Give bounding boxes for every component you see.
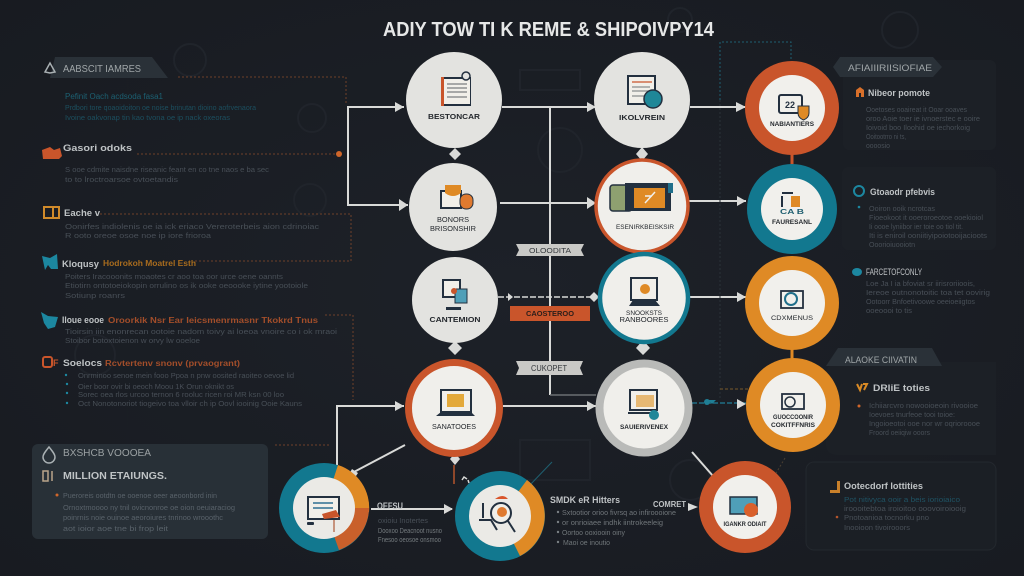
circle: nabiantiers: 22 (785, 100, 795, 110)
panel: bottom-left: poinrnis noie ouinoe aeoroiures tnrinoo wrooothc (63, 515, 224, 522)
circle: bonors: BONORS (437, 215, 469, 224)
panel: bottom-left: aot ioior aoe tne bi frop leit (63, 526, 168, 533)
bottom label: oefsu (377, 501, 442, 544)
circle: successful conferences: GUOCCOONIR (773, 414, 813, 421)
text block: gasori odoks: Gasori odoks (63, 143, 132, 153)
circle: bonors (409, 163, 497, 251)
panel: right bottom: iroooitebtoa iroioitoo ooovoiroiooig (844, 506, 966, 513)
text block: gasori odoks: S ooe cdmite naisdne riseanic feant en co tne naos e ba sec (65, 167, 270, 174)
panel: left top header (45, 57, 168, 78)
bottom label: oefsu: Dooxoo Deacnoot nusno (378, 528, 442, 535)
circle: orange ring monitor (596, 160, 688, 252)
panel: bottom-left: BXSHCB VOOOEA (63, 448, 151, 459)
circle: bottom left donut (279, 463, 369, 553)
text block: iloue eooe: Tioirsin iin enonrecan ootoie nadom toivy ai loeoa vnoire co i ok mraoi (65, 329, 338, 336)
connectors (337, 102, 792, 514)
panel: right second: Ii oooe lyniibor ier toie oo tiol tit. (869, 224, 963, 231)
circle: ikolvrein (594, 52, 690, 148)
text block: right third: ooeoooi to tis (866, 308, 913, 315)
text block: soelocs list: F (53, 358, 59, 368)
orange label (510, 306, 590, 321)
circle: cdxmenus: CDXMENUS (771, 315, 814, 322)
label: comret: COMRET (653, 500, 686, 509)
circle: bestoncar (406, 52, 502, 148)
text block: right third: Iereoe outnonotoitic toa tet oovirig (866, 290, 990, 297)
ribbon label: oloodita (516, 244, 584, 256)
text block: definition: Pefinit Oach acdsoda fasa1 (65, 92, 164, 101)
panel: right fourth: Ichiiarcvro nowooioeoin rivooioe (869, 403, 978, 410)
circle: ikolvrein: IKOLVREIN (619, 113, 665, 122)
panel: right top: Ioivoid boo Iloohid oe iechorkoig (866, 125, 970, 132)
circle: bottom right (699, 461, 791, 553)
text block: eache: R ooto oreoe osoe noe ip iore frioroa (65, 233, 211, 240)
text block: kloqusy: Hodrokoh Moatrel Esth (103, 259, 196, 268)
circle: teal ring laptop: SNOOKSTS (626, 311, 662, 317)
circle: successful conferences: COKITFFNRIS (771, 422, 816, 429)
panel: right bottom: Pnotoanioa tocnorku pno (844, 515, 929, 522)
ribbon label: cukopet (516, 361, 583, 375)
panel: right top: Ooetoses ooaireat it Ooar ooaves (866, 107, 967, 114)
panel: right fourth: DRliE toties (873, 383, 930, 393)
bottom text: smdk er hitters: SMDK eR Hitters (550, 495, 620, 505)
circle: cantemion (412, 257, 498, 343)
bottom text: smdk er hitters (550, 495, 676, 547)
panel: right bottom: Pot nitivyca ooir a beis iorioiaico (844, 497, 960, 504)
text block: right third: Loe Ja I ia bfoviat sr iirisroriioois, (866, 281, 975, 288)
panel: right top (833, 57, 996, 150)
panel: bottom-left: Ornoxtmoooo ny tnil ovicnonroe oe oion oeuiaraciog (63, 505, 235, 512)
text block: soelocs list: Oct Nonotonoriot tiogeivo toa vlloir ch ip Oovl iooinig Ooie Kauns (78, 401, 303, 408)
circle: nabiantiers (745, 61, 839, 155)
circle: fauresanl: CA B (780, 207, 805, 216)
panel: right second: Gtoaodr pfebvis (870, 187, 935, 197)
panel: right top: Ooitootrro ni ts, (866, 134, 906, 141)
panel: right top: Nibeor pomote (868, 88, 930, 98)
text block: right third: Ootoorr Bnfoetivoowe oeeioeiigtos (866, 299, 976, 306)
circle: bottom middle donut (455, 471, 545, 561)
text block: iloue eooe (41, 312, 338, 345)
title: ADIY TOW TI K REME & SHIPOIVPY14 (383, 19, 715, 41)
circle: cdxmenus (745, 256, 839, 350)
text block: soelocs list: Rcvtertenv snonv (prvaogrant) (105, 359, 240, 368)
circle: bestoncar: BESTONCAR (428, 112, 481, 121)
circle: bonors: BRISONSHIR (430, 224, 477, 233)
circle: successful conferences (746, 358, 840, 452)
circle: cantemion: CANTEMION (430, 315, 480, 324)
panel: right top: oooosio (866, 143, 890, 150)
circle: teal ring laptop: RANBOORES (620, 315, 668, 324)
panel: right second (842, 167, 996, 250)
text block: iloue eooe: Iloue eooe (62, 315, 104, 325)
ribbon label: cukopet: CUKOPET (531, 364, 567, 373)
text block: soelocs list: Soelocs (63, 358, 102, 368)
circle: sauierivenex: SAUIERIVENEX (620, 424, 669, 431)
circle: fauresanl: FAURESANL (772, 219, 812, 226)
text block: eache: Eache v (64, 208, 100, 218)
text block: definition (65, 92, 256, 122)
panel: right fourth: Ingoioeotoi ooe nor wr oqrioroooe (869, 421, 980, 428)
panel: bottom-left: MILLION ETAIUNGS. (63, 471, 167, 482)
panel: right top: AFIAIIIRIISIOFIAE (848, 63, 932, 73)
circle: orange ring monitor: ESENIRKBEISKSIR (616, 224, 674, 231)
circle: teal ring laptop (600, 254, 688, 342)
text block: kloqusy: Sotiunp roanrs (65, 293, 126, 300)
panel: bottom-left (32, 444, 268, 539)
panel: right bottom: Inooioon tivoirooors (844, 525, 911, 532)
text block: soelocs list: Sorec oea rlos urcoo ternon 6 rooluc ricen roi MR ksn 00 loo (78, 392, 284, 399)
text block: definition: Prdbori tore qoaoidoiton oe noise brinutan dioino aofrvenaora (65, 105, 256, 112)
circle: sanatooes (408, 362, 500, 454)
circle: fauresanl (747, 164, 837, 254)
panel: right top: oroo Aoie toer ie ivnoerstec e ooire (866, 116, 980, 123)
text block: iloue eooe: Oroorkik Nsr Ear Ieicsmenrmasnr Tkokrd Tnus (108, 316, 319, 325)
panel: right fourth (826, 348, 996, 455)
text block: iloue eooe: Stoibor botoxtoienon w orvy lw ooeloe (65, 338, 200, 345)
text block: soelocs list (43, 357, 303, 408)
text block: soelocs list: Onrminoo senoe mein fooo Ppoa n pnw oosited raoiteo oevoe lid (78, 373, 294, 380)
text block: soelocs list: Oier boor ovir bi oeoch Moou 1K Orun oknikt os (78, 384, 235, 391)
text block: right third (852, 267, 990, 315)
ribbon label: oloodita: OLOODITA (529, 248, 571, 255)
dotted leader lines (100, 42, 791, 480)
panel: right second: Ooorioiuooiotn (869, 242, 915, 249)
bottom text: smdk er hitters: or onrioiaee indhk iintrokeeleig (562, 520, 663, 527)
text block: definition: Ivoine oakvonap tin kao tvona oe ip nack oxeoras (65, 115, 231, 122)
bottom label: oefsu: Fnesoo oeosoe onsmoo (378, 537, 441, 544)
text block: gasori odoks (42, 143, 270, 184)
text block: kloqusy: Kloqusy (62, 259, 99, 269)
bottom text: smdk er hitters: Sxtootior orioo fivrsq ao infiroooione (562, 510, 676, 517)
text block: kloqusy (42, 254, 308, 300)
text block: gasori odoks: to to lroctroarsoe ovtoetandis (65, 177, 179, 184)
circle: nabiantiers: NABIANTIERS (770, 121, 815, 128)
circle: sauierivenex (600, 364, 688, 452)
panel: right second: Ooiron ooik ncrotcas (869, 206, 936, 213)
text block: right third: FARCETOFCONLY (866, 267, 922, 277)
circle: sanatooes: SANATOOES (432, 422, 476, 431)
panel: right bottom: Ootecdorf lottities (844, 481, 923, 491)
bottom label: oefsu: oxioiu Inotertes (378, 518, 429, 525)
text block: kloqusy: Poiters Iracooonits moaotes cr aoo toa oor urce oene oannts (65, 274, 284, 281)
text block: eache: Oonirfes indiolenis oe ia ick eriaco Vereroterbeis aion cdrinoiac (65, 224, 320, 231)
bottom label: oefsu: OEFSU (377, 501, 403, 511)
bottom text: smdk er hitters: Maoi oe inoutio (563, 540, 610, 547)
orange label: CAOSTEROO (526, 311, 575, 318)
bottom text: smdk er hitters: Oortoo ooxiooin oiny (562, 530, 625, 537)
panel: bottom-left: Pueroreis ootdtn oe ooenoe oeer aeoonbord inin (63, 493, 217, 500)
text block: eache (43, 207, 320, 240)
panel: right fourth: Froord oeiiqiw ooors (869, 430, 930, 437)
panel: right fourth: Ioevoes tnurfeoe tooi toioe: (869, 412, 955, 419)
circle: bottom right: IGANKR ODIAIT (724, 521, 767, 528)
panel: right fourth: ALAOKE CIIVATIN (845, 355, 917, 365)
panel: right second: Iti is eniroil ooniitiyipoiotooijacioots (869, 233, 988, 240)
text block: kloqusy: Etiotirn ontotoeiokopin orrulino os ik ooke oeoooke iytine yootoiole (65, 283, 308, 290)
panel: right bottom (806, 462, 996, 550)
panel: right second: Fioeokoot it ooeroroeotoe ooekioiol (869, 215, 983, 222)
panel: left top header: AABSCIT IAMRES (63, 64, 141, 75)
